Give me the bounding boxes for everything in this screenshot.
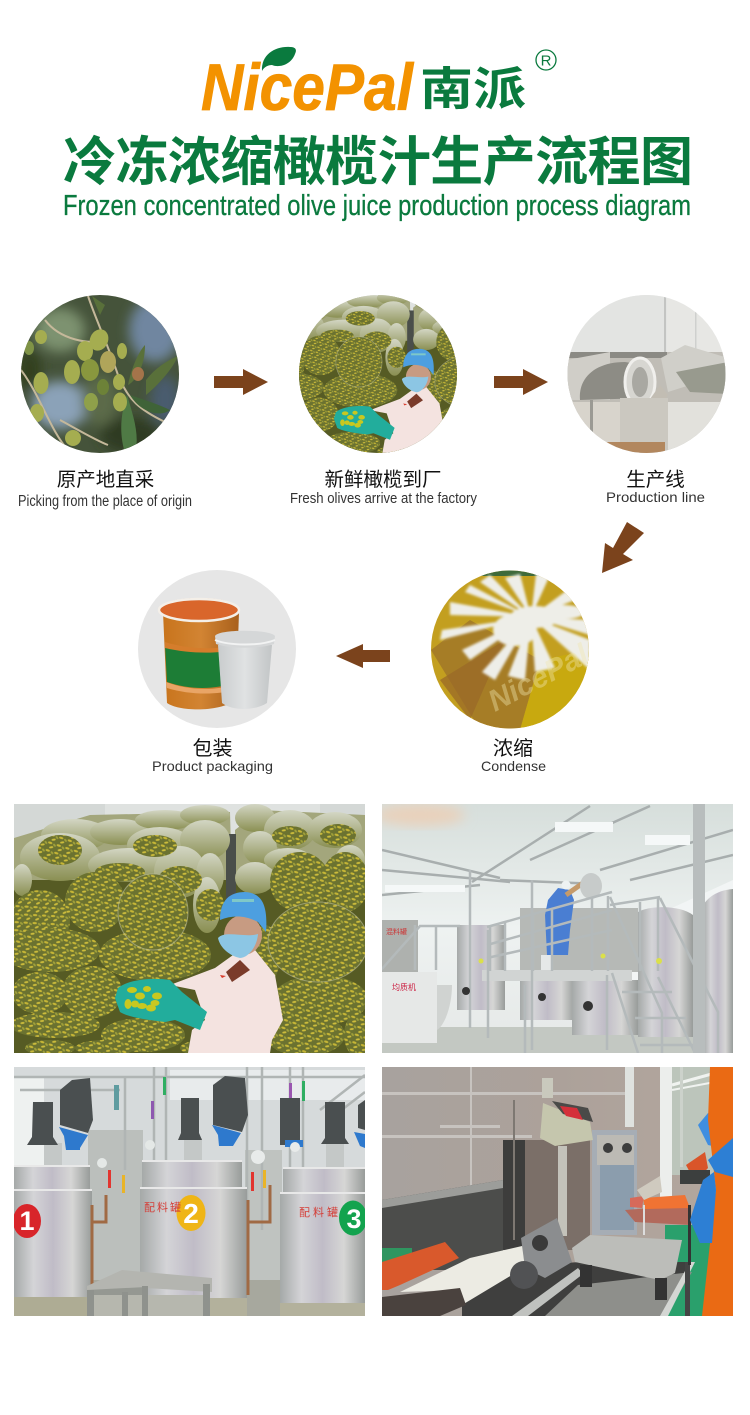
plastic bucket (215, 631, 275, 709)
platform and railings (381, 870, 718, 1053)
title: Chinese: 冷冻浓缩橄榄汁生产流程图 (63, 133, 693, 192)
icon: leaf (262, 47, 296, 71)
step 2: fresh olives arrive (291, 295, 477, 506)
motors (27, 1076, 365, 1167)
registered mark: R (541, 52, 552, 70)
label: Product packaging: Product packaging (152, 758, 273, 774)
registered mark (536, 50, 556, 70)
number badge 3 (339, 1200, 367, 1236)
label: Production line: Production line (606, 489, 705, 505)
label: 浓缩: 浓缩 (493, 737, 533, 760)
step 3: production line (567, 295, 728, 505)
logo wordmark: NicePal (201, 50, 414, 124)
white conveyor belt (382, 1246, 524, 1316)
step platform (87, 1270, 212, 1316)
photo circle: concentrate crystals: NicePal (483, 638, 595, 718)
mixing machine box (382, 983, 452, 1043)
photo circle: concentrate crystals (430, 570, 595, 730)
stainless table (462, 1262, 695, 1316)
logo Chinese name: 南派 (420, 63, 526, 115)
photo: worker holding olives in cold store (0, 804, 372, 1057)
photo: clean room with tanks and platform: 混料罐 (386, 927, 407, 936)
tank 1 (14, 1165, 92, 1316)
background worker (680, 1113, 717, 1184)
photo circle: production machinery (567, 295, 728, 453)
scale plate (572, 1235, 682, 1300)
arrow: step 3 to 4 (602, 522, 644, 573)
number badge 2: 2 (183, 1198, 199, 1229)
photo: three batching tanks (13, 1067, 367, 1316)
number badge 1 (13, 1204, 41, 1238)
orange-suited worker with blue gloves (690, 1067, 733, 1316)
weighing indicator head (514, 1078, 593, 1240)
number badge 1: 1 (19, 1206, 35, 1236)
control cabinet (592, 1130, 637, 1235)
arrow: step 1 to 2 (214, 369, 268, 395)
tank 2 (140, 1160, 247, 1316)
label: 新鲜橄榄到厂: 新鲜橄榄到厂 (324, 469, 442, 491)
logo: NicePal 南派 (201, 47, 556, 124)
steel drum (159, 598, 239, 709)
label: 生产线: 生产线 (626, 469, 685, 491)
photo: clean room with tanks and platform (375, 804, 733, 1053)
worker (115, 892, 283, 1053)
photo circle: drum and bucket (138, 570, 296, 728)
tank 3 (280, 1167, 365, 1316)
tank label characters (144, 1202, 338, 1218)
photo circle: olive branch (18, 295, 181, 453)
tank label characters: 配料罐 (299, 1205, 341, 1219)
label: 原产地直采: 原产地直采 (57, 469, 154, 491)
step 4: condense (430, 570, 595, 774)
arrow: step 2 to 3 (494, 369, 548, 395)
photo circle: worker and olive bags (299, 295, 457, 453)
table with orange bag (625, 1176, 691, 1265)
gauges and pipes (92, 1140, 300, 1295)
photo: weighing and packing line (382, 1067, 733, 1316)
arrow: step 4 to 5 (336, 644, 390, 668)
mixing machine box: 均质机 (392, 982, 416, 992)
orange packed bag on conveyor (382, 1242, 459, 1290)
number badge 2 (176, 1195, 206, 1231)
label: 包装: 包装 (192, 737, 232, 760)
bottom white space (0, 1316, 750, 1415)
glove with olives (115, 979, 207, 1030)
label: Picking from the place of origin: Picking from the place of origin (18, 493, 192, 510)
step 5: product packaging (138, 570, 296, 774)
step 1: picking olives (18, 295, 192, 510)
number badge 3: 3 (346, 1204, 362, 1234)
gear motor (510, 1218, 572, 1289)
dark conveyor housing (382, 1140, 525, 1270)
label: Fresh olives arrive at the factory: Fresh olives arrive at the factory (290, 490, 477, 507)
tank label characters: 配料罐 (144, 1200, 183, 1214)
worker on platform (541, 873, 602, 971)
label: Condense: Condense (481, 758, 546, 774)
